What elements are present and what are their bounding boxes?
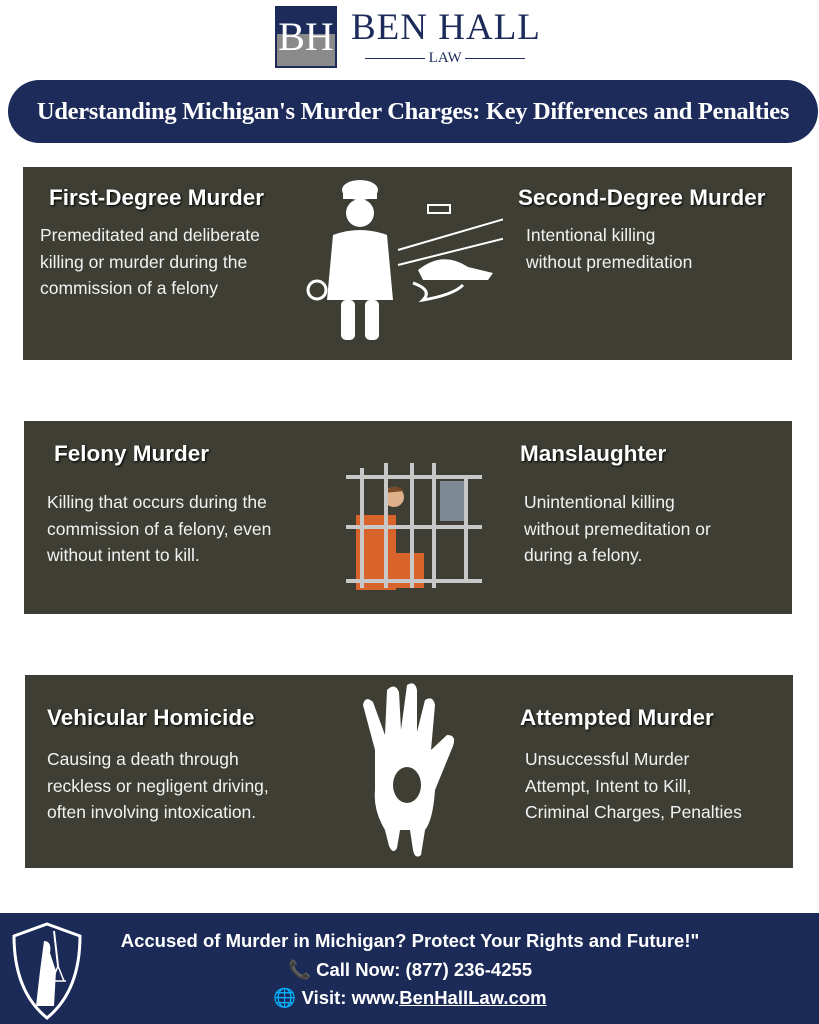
heading: manslaughter: Manslaughter [520, 441, 666, 466]
heading: vehicular homicide: Vehicular Homicide [47, 705, 255, 730]
text: manslaughter: during a felony. [524, 545, 642, 565]
text: attempted murder: Attempt, Intent to Kill, [525, 776, 691, 796]
text: first-degree: killing or murder during the [40, 252, 247, 272]
text: attempted murder: Criminal Charges, Penalties [525, 802, 742, 822]
CTA text: 📞 Call Now: (877) 236-4255 [288, 958, 532, 980]
panel: felony/manslaughter [24, 421, 792, 614]
icon: BH monogram [275, 6, 337, 68]
heading: attempted murder: Attempted Murder [520, 705, 714, 730]
text: felony murder: commission of a felony, even [47, 518, 271, 538]
text: attempted murder: Unsuccessful Murder [525, 749, 689, 769]
text: second-degree [526, 225, 692, 272]
text: felony murder [47, 492, 271, 565]
text: felony murder: Killing that occurs during the [47, 492, 267, 512]
brand name: BEN HALL [351, 7, 541, 48]
CTA text: 🌐 Visit: www.BenHallLaw.com [273, 987, 547, 1008]
text: felony murder: without intent to kill. [47, 545, 200, 565]
icon: bloody hand [363, 683, 454, 857]
icon: prisoner behind bars [346, 463, 482, 590]
text: vehicular homicide: often involving intoxication. [47, 802, 256, 822]
heading: first-degree: First-Degree Murder [49, 185, 264, 210]
text: first-degree: Premeditated and deliberate [40, 225, 260, 245]
text: manslaughter [524, 492, 711, 565]
logo [275, 6, 541, 68]
text: manslaughter: without premeditation or [524, 518, 711, 538]
panel: vehicular/attempted [25, 675, 793, 868]
CTA text: Accused of Murder in Michigan? Protect Your Rights and Future!" [121, 930, 699, 951]
text: first-degree: commission of a felony [40, 278, 218, 298]
text: second-degree: without premeditation [526, 252, 692, 272]
text: attempted murder [525, 749, 742, 822]
icon: lady justice shield [12, 922, 82, 1020]
heading: felony murder: Felony Murder [54, 441, 209, 466]
CTA text [121, 930, 699, 1008]
logo: LAW [429, 50, 461, 66]
text: second-degree: Intentional killing [526, 225, 655, 245]
text: first-degree [40, 225, 260, 298]
title [8, 80, 818, 143]
text: vehicular homicide: reckless or negligent driving, [47, 776, 269, 796]
text: manslaughter: Unintentional killing [524, 492, 675, 512]
icon: BH monogram: BH [278, 14, 334, 59]
heading: second-degree: Second-Degree Murder [518, 185, 766, 210]
text: vehicular homicide [47, 749, 269, 822]
footer [0, 913, 819, 1024]
icon: detective and body [306, 180, 503, 340]
text: vehicular homicide: Causing a death through [47, 749, 239, 769]
title: Uderstanding Michigan's Murder Charges: Key Differences and Penalties [37, 98, 789, 125]
panel: first/second degree [23, 167, 792, 360]
